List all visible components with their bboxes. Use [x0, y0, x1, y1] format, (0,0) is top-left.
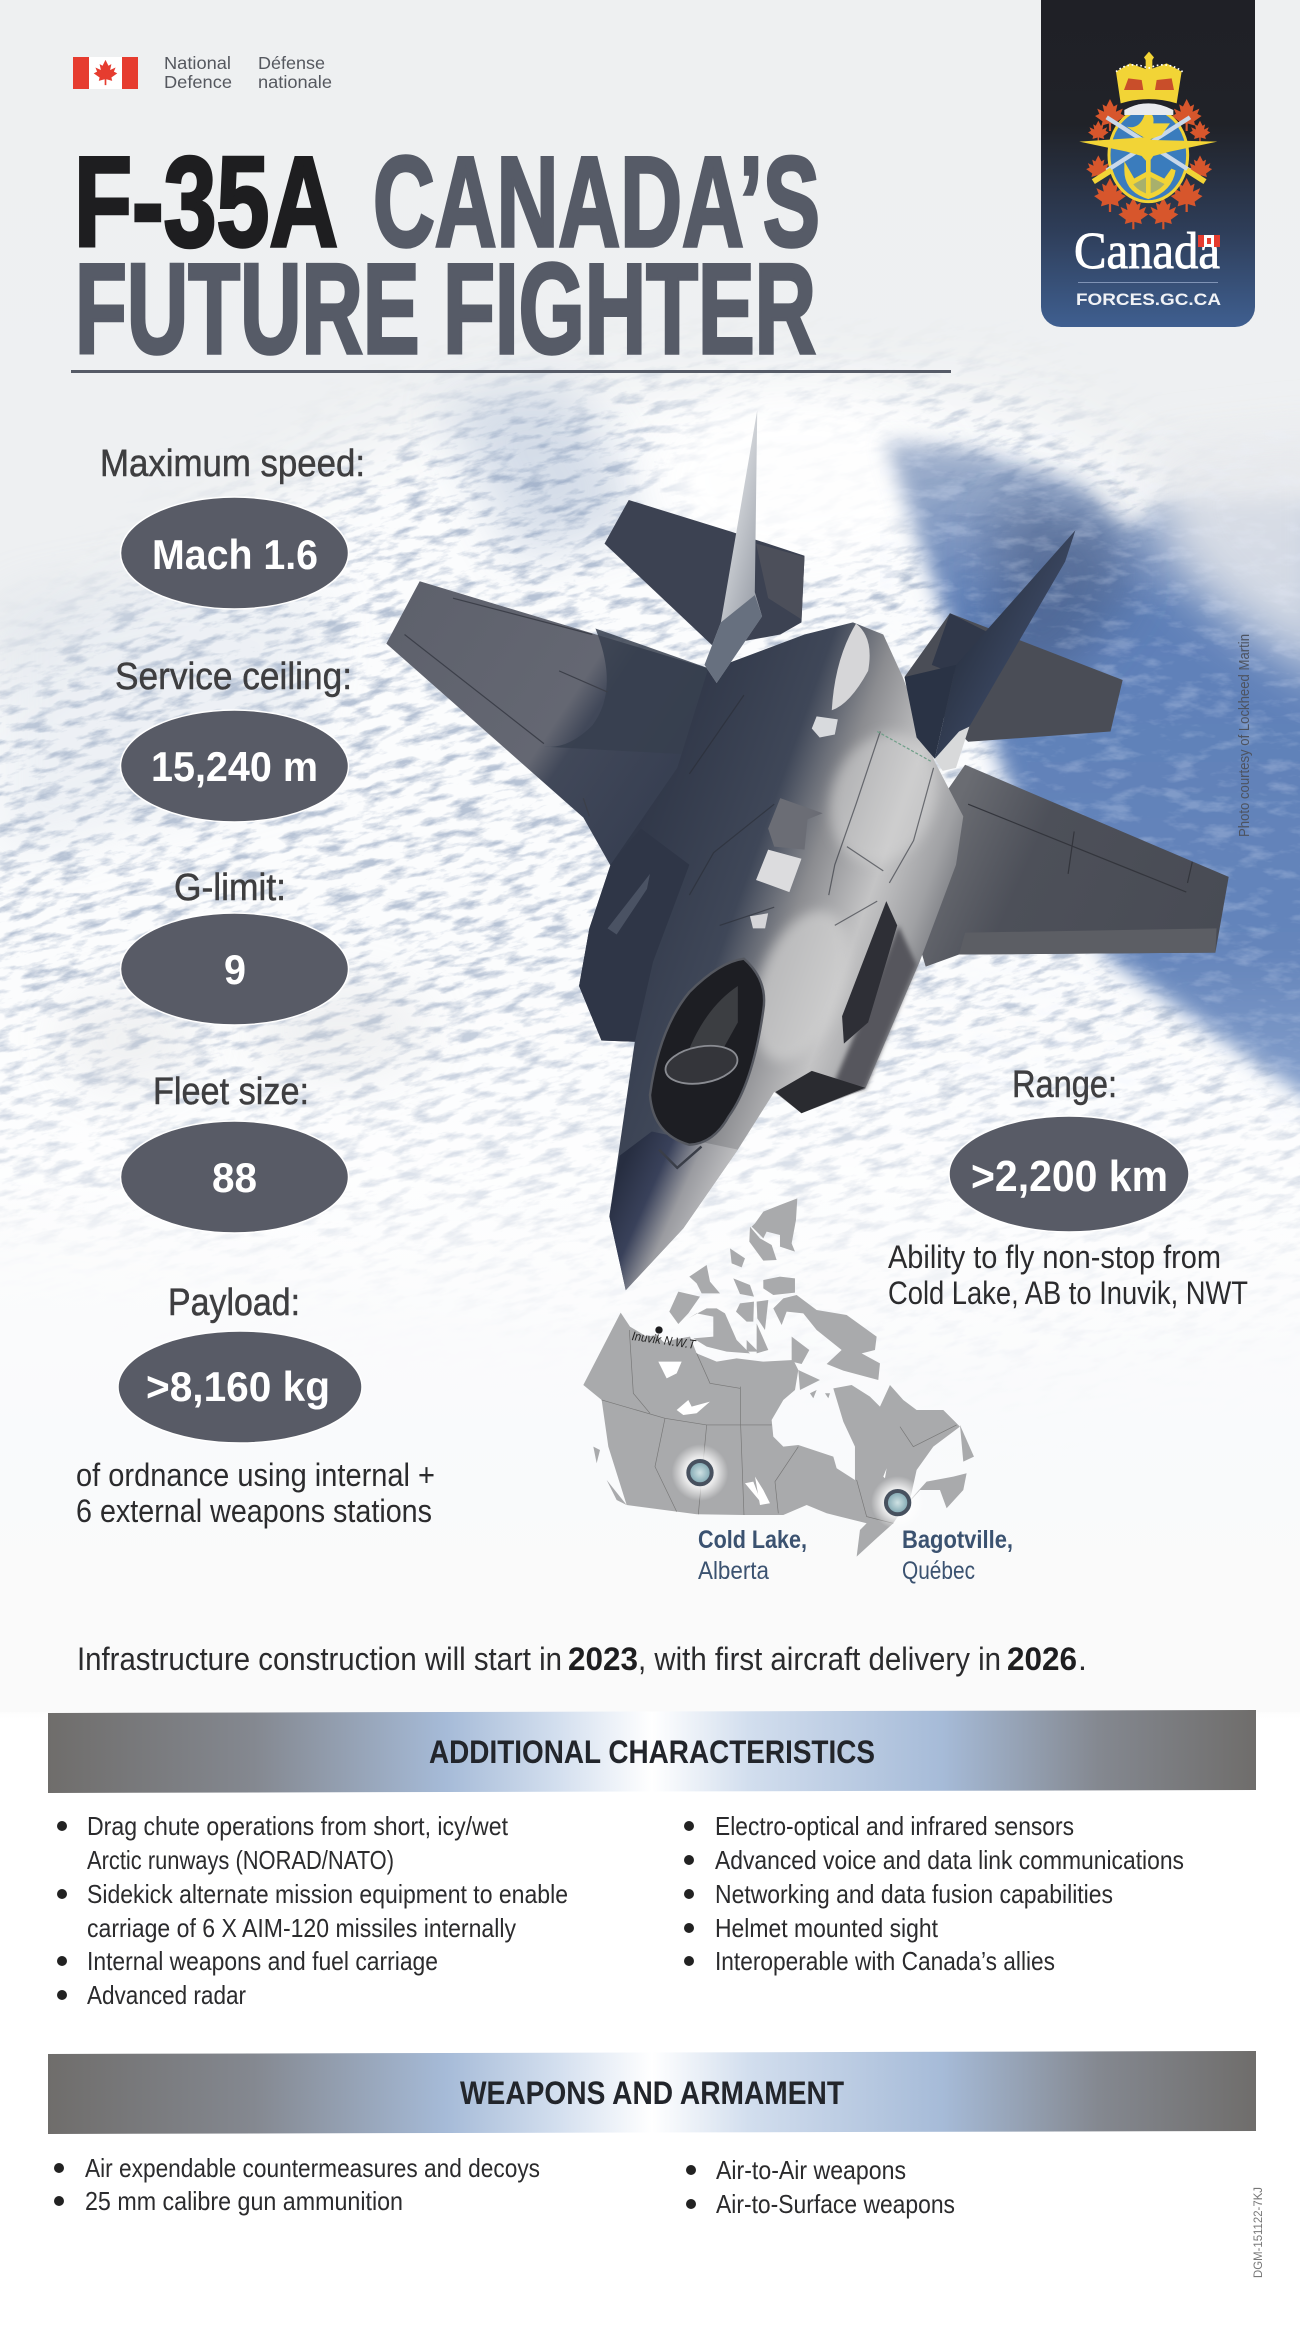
left list: [54, 2153, 540, 2216]
timeline statement: .: [1078, 1641, 1087, 1677]
stat: service ceiling: 15,240 m: [151, 743, 318, 790]
flag: [73, 57, 138, 89]
stat: payload: >8,160 kg: [146, 1363, 330, 1410]
right list: Networking and data fusion capabilities: [715, 1879, 1113, 1909]
title: CANADA’S: [373, 131, 820, 274]
stat: payload: of ordnance using internal +: [76, 1457, 435, 1493]
timeline statement: Infrastructure construction will start in: [77, 1641, 562, 1677]
left list: Advanced radar: [87, 1980, 246, 2010]
stat: fleet size: [120, 1071, 348, 1233]
stat: fleet size: 88: [212, 1154, 257, 1201]
title: [74, 131, 820, 381]
stat: fleet size: Fleet size:: [153, 1071, 309, 1113]
logo: National Defence signature: National: [164, 53, 231, 73]
timeline statement: [77, 1641, 1087, 1677]
logo: National Defence signature: Defence: [164, 72, 232, 92]
map labels: Québec: [902, 1557, 975, 1585]
left horizontal stabilizer: [605, 500, 804, 647]
marker: Cold Lake: [672, 1444, 728, 1501]
section bar: [48, 1710, 1256, 1793]
title: FUTURE FIGHTER: [75, 238, 816, 381]
right list: Advanced voice and data link communications: [715, 1845, 1184, 1875]
left list: Air expendable countermeasures and decoys: [85, 2153, 540, 2183]
right wing: [895, 765, 1229, 967]
background: snowy mountains photo: [0, 0, 1300, 1378]
logo: National Defence signature: [73, 53, 332, 92]
stat: service ceiling: [115, 656, 352, 822]
stat: range: [888, 1064, 1248, 1311]
right list: [686, 2155, 955, 2219]
stat: G-limit: [120, 867, 348, 1025]
stat: payload: [76, 1282, 435, 1529]
tail cone: [832, 624, 870, 710]
panel: Canadian Forces logo: FORCES.GC.CA: [1076, 290, 1221, 309]
section bar: WEAPONS AND ARMAMENT: [460, 2075, 844, 2111]
timeline statement: , with first aircraft delivery in: [638, 1641, 1001, 1677]
map labels: [698, 1526, 1013, 1585]
stat: range: Cold Lake, AB to Inuvik, NWT: [888, 1275, 1248, 1311]
left list: 25 mm calibre gun ammunition: [85, 2186, 403, 2216]
left list: Arctic runways (NORAD/NATO): [87, 1845, 394, 1875]
marker: Inuvik: Inuvik N.W.T: [631, 1329, 697, 1352]
stat: payload: 6 external weapons stations: [76, 1493, 432, 1529]
canopy: [650, 959, 764, 1168]
nose: [609, 1131, 738, 1290]
logo: National Defence signature: Défense: [258, 53, 325, 73]
province borders: [602, 1330, 957, 1523]
right list: Electro-optical and infrared sensors: [715, 1811, 1074, 1841]
stat: payload: Payload:: [168, 1282, 300, 1324]
right side lower body and intake: [829, 925, 917, 1095]
section: weapons and armament: [48, 2051, 1256, 2219]
photo credit: Photo courtesy of Lockheed Martin: [1236, 634, 1253, 837]
stat: range: Ability to fly non-stop from: [888, 1239, 1221, 1275]
logo: National Defence signature: nationale: [258, 72, 332, 92]
panel: Canadian Forces logo: [1041, 0, 1255, 327]
map labels: Cold Lake,: [698, 1526, 807, 1554]
right vertical tail: [935, 530, 1075, 759]
stat: range: >2,200 km: [971, 1152, 1168, 1201]
right list: Air-to-Surface weapons: [716, 2189, 955, 2219]
left wing: [386, 581, 720, 868]
doors: [750, 716, 838, 928]
left list: carriage of 6 X AIM-120 missiles internally: [87, 1913, 516, 1943]
right list: Helmet mounted sight: [715, 1913, 939, 1943]
timeline statement: 2023: [568, 1641, 638, 1677]
section bar: ADDITIONAL CHARACTERISTICS: [429, 1734, 875, 1770]
left list: Internal weapons and fuel carriage: [87, 1946, 438, 1976]
right list: Interoperable with Canada’s allies: [715, 1946, 1055, 1976]
stat: service ceiling: Service ceiling:: [115, 656, 352, 698]
left vertical tail: [705, 410, 762, 683]
document code: DGM-151122-7KJ: [1251, 2187, 1265, 2278]
stat: maximum speed: Maximum speed:: [100, 443, 365, 485]
stat: maximum speed: Mach 1.6: [152, 531, 318, 578]
arctic islands: [593, 1198, 974, 1505]
map: Canada: [583, 1198, 974, 1557]
Canada wordmark: Canada: [1074, 223, 1220, 280]
fuselage: [579, 622, 963, 1290]
section bar: [48, 2051, 1256, 2134]
stat: range: Range:: [1012, 1064, 1117, 1106]
icon: Canadian Forces crest: [1079, 52, 1217, 229]
mainland: [583, 1313, 967, 1557]
lakes: [658, 1362, 887, 1505]
marker: Bagotville: [871, 1476, 924, 1529]
map labels: Alberta: [698, 1557, 769, 1585]
stat: G-limit: 9: [224, 946, 246, 993]
left list: [57, 1811, 568, 2010]
stat: maximum speed: [100, 443, 365, 609]
map labels: Bagotville,: [902, 1526, 1013, 1554]
jet: F-35A illustration: [386, 410, 1229, 1290]
right list: Air-to-Air weapons: [716, 2155, 906, 2185]
section: additional characteristics: [48, 1710, 1256, 2010]
timeline statement: 2026: [1007, 1641, 1077, 1677]
left list: Sidekick alternate mission equipment to enable: [87, 1879, 568, 1909]
stat: G-limit: G-limit:: [174, 867, 286, 909]
title: F-35A: [74, 131, 338, 274]
right list: [684, 1811, 1184, 1976]
right horizontal stabilizer: [904, 613, 1123, 742]
left list: Drag chute operations from short, icy/wet: [87, 1811, 509, 1841]
panel details: [689, 695, 934, 925]
